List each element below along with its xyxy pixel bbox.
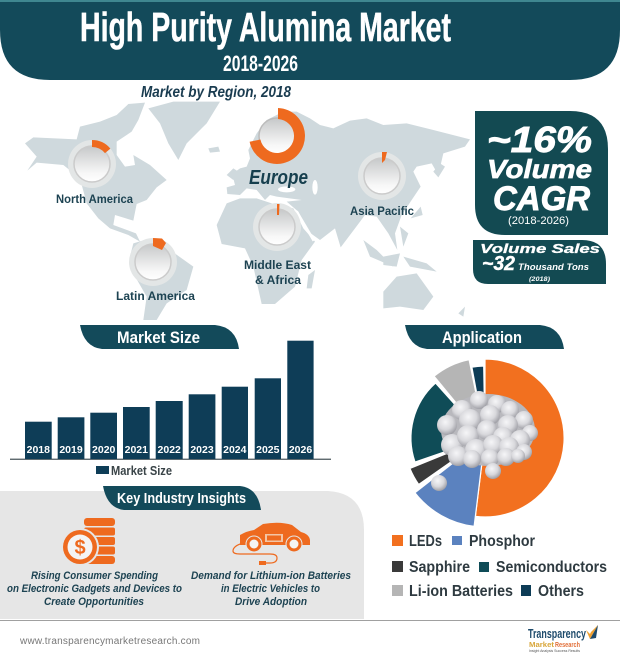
bar chart: market size: 2018 <box>27 444 50 456</box>
text: rising consumer spending <box>7 570 182 608</box>
label: north america: North America <box>56 192 133 206</box>
legend item: others: Others <box>538 583 584 600</box>
legend item: semiconductors: Semiconductors <box>496 559 607 576</box>
alumina balls <box>431 391 538 491</box>
bar chart: market size: 2021 <box>125 444 148 456</box>
bar chart: market size: 2026 <box>289 444 312 456</box>
bar chart: market size: 2020 <box>92 444 116 456</box>
text: demand for lithium-ion batteries: in Electric Vehicles to <box>221 583 320 595</box>
text: rising consumer spending: Create Opportunities <box>44 596 144 608</box>
icon: coins <box>61 518 115 566</box>
label: latin america: Latin America <box>116 289 195 303</box>
callout: volume sales: Thousand Tons <box>518 262 589 272</box>
legend item: leds: LEDs <box>409 533 442 550</box>
bar chart: market size: 2022 <box>158 444 181 456</box>
heading: key industry insights <box>103 486 261 510</box>
callout: volume sales: Volume Sales <box>480 241 600 256</box>
header banner <box>0 0 620 80</box>
heading: market size <box>80 325 239 349</box>
logo: transparency market research: Insight Analysis Success Results <box>529 648 580 653</box>
donut: latin america <box>129 238 177 286</box>
legend item: phosphor: Phosphor <box>469 533 535 550</box>
callout: volume cagr <box>475 111 608 235</box>
text: rising consumer spending: on Electronic Gadgets and Devices to <box>7 583 182 595</box>
heading: key industry insights: Key Industry Insights <box>117 490 246 507</box>
world map <box>25 102 470 320</box>
footer url: www.transparencymarketresearch.com <box>19 636 200 647</box>
donut: europe <box>250 108 305 164</box>
label: europe: Europe <box>249 167 308 189</box>
legend item: others <box>521 583 584 600</box>
bar chart: market size: 2024 <box>223 444 247 456</box>
title: High Purity Alumina Market <box>80 4 451 50</box>
callout: volume sales: (2018) <box>529 276 550 283</box>
heading: application: Application <box>442 328 522 347</box>
callout: volume cagr: (2018-2026) <box>508 215 569 227</box>
heading: market size: Market Size <box>117 328 200 347</box>
logo: transparency market research: Market <box>529 642 555 649</box>
chart legend: market size: Market Size <box>111 464 172 478</box>
subtitle years: 2018-2026 <box>223 51 298 76</box>
text: demand for lithium-ion batteries: Drive Adoption <box>235 596 307 608</box>
label: middle east and africa: Middle East <box>244 258 311 272</box>
callout: volume cagr: ~16% <box>487 119 592 160</box>
icon: coins: $ <box>74 537 86 559</box>
pie chart: application <box>410 359 564 526</box>
bar chart: market size: 2019 <box>59 444 83 456</box>
legend item: sapphire: Sapphire <box>409 559 470 576</box>
panel: key industry insights <box>0 486 620 621</box>
callout: volume sales <box>473 240 606 284</box>
pie legend <box>392 533 607 600</box>
bar chart: market size: 2025 <box>256 444 280 456</box>
heading: market by region: Market by Region, 2018 <box>141 84 291 101</box>
callout: volume sales: ~32 <box>482 253 515 275</box>
text: rising consumer spending: Rising Consumer Spending <box>31 570 158 582</box>
legend item: leds <box>392 533 442 550</box>
legend item: li-ion batteries: Li-ion Batteries <box>409 583 513 600</box>
donut: asia pacific <box>358 152 406 200</box>
donut: middle east and africa <box>253 203 301 251</box>
text: demand for lithium-ion batteries <box>191 570 351 608</box>
callout: volume cagr: CAGR <box>493 180 590 218</box>
logo: transparency market research: Research <box>555 642 580 649</box>
donut: north america <box>68 140 116 188</box>
text: demand for lithium-ion batteries: Demand for Lithium-ion Batteries <box>191 570 351 582</box>
logo: transparency market research: Transparency <box>528 626 587 641</box>
label: middle east and africa <box>244 258 311 287</box>
logo: transparency market research <box>528 625 598 653</box>
icon: electric car <box>233 523 310 565</box>
callout: volume cagr: Volume <box>487 154 592 184</box>
bar chart: market size <box>10 341 331 460</box>
heading: application <box>405 325 564 349</box>
bar chart: market size: 2023 <box>190 444 214 456</box>
label: asia pacific: Asia Pacific <box>350 204 414 218</box>
label: middle east and africa: & Africa <box>255 273 301 287</box>
